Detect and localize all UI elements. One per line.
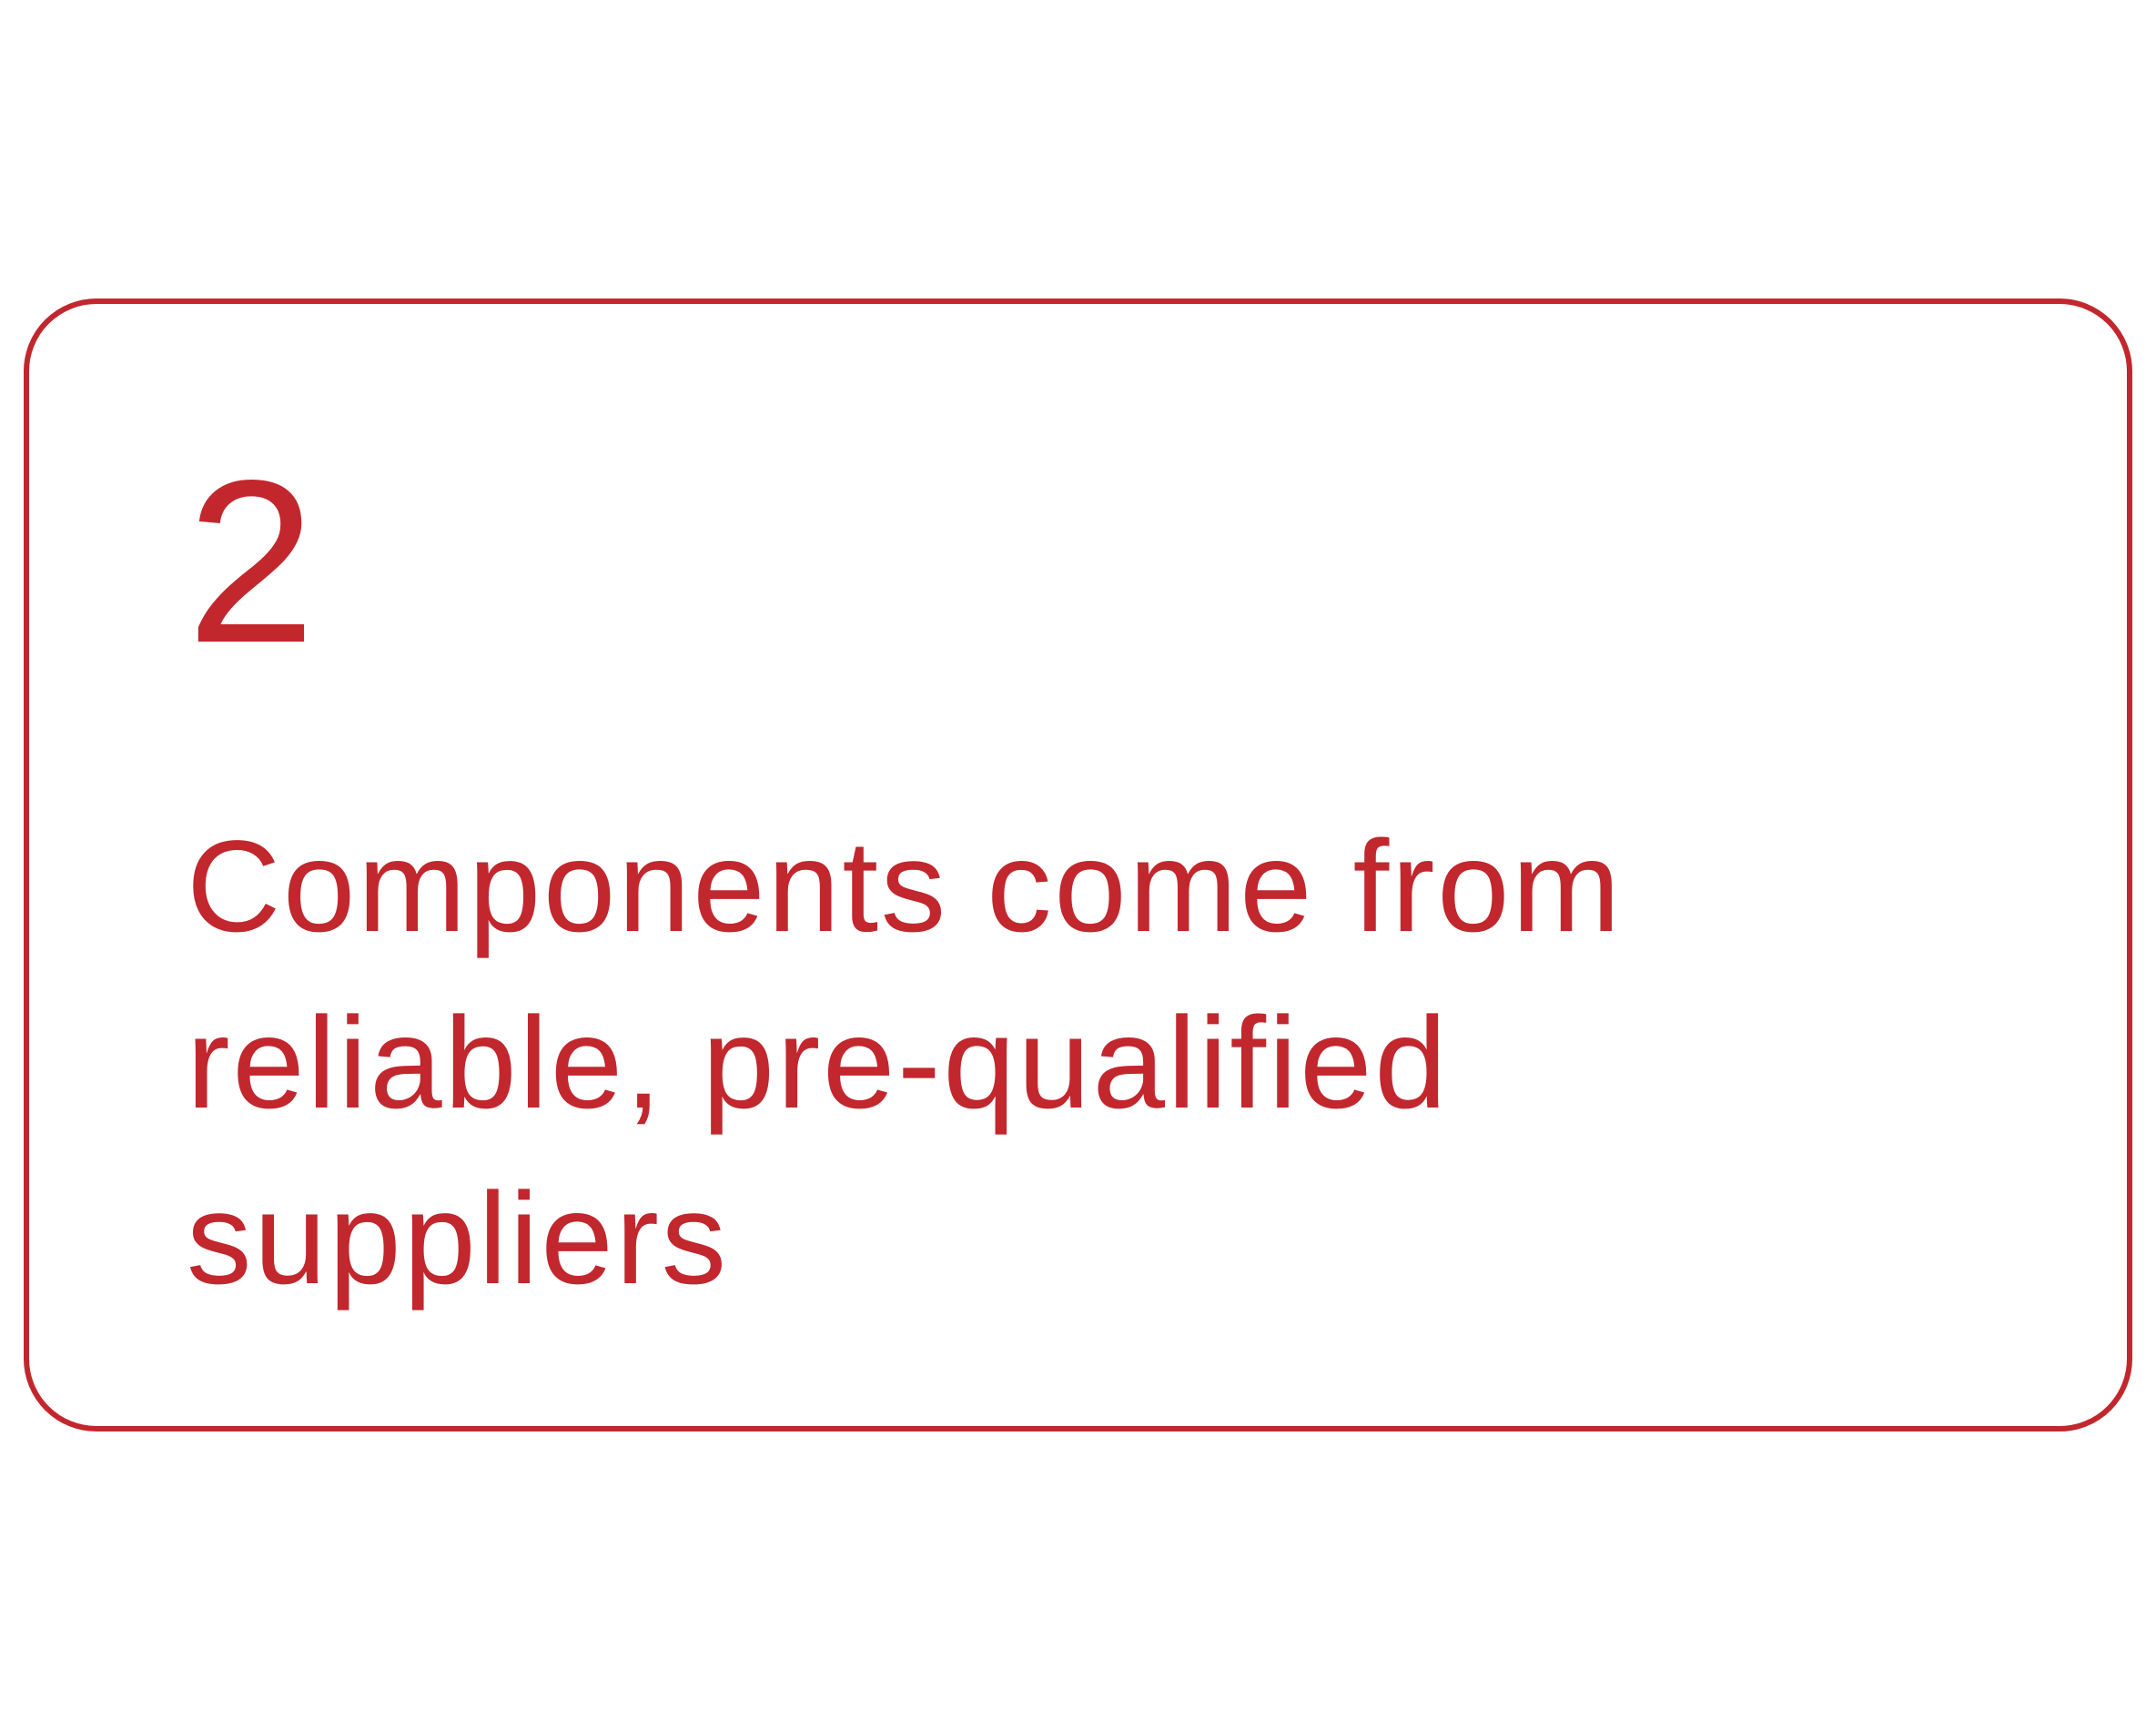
text block: description: reliable, pre-qualified xyxy=(187,990,1449,1136)
number: 2: 2 xyxy=(187,432,316,692)
text block: description: Components come from xyxy=(187,814,1623,959)
text block: description xyxy=(187,814,1623,1311)
text block: description: suppliers xyxy=(187,1167,729,1311)
panel: card xyxy=(24,298,2132,1432)
